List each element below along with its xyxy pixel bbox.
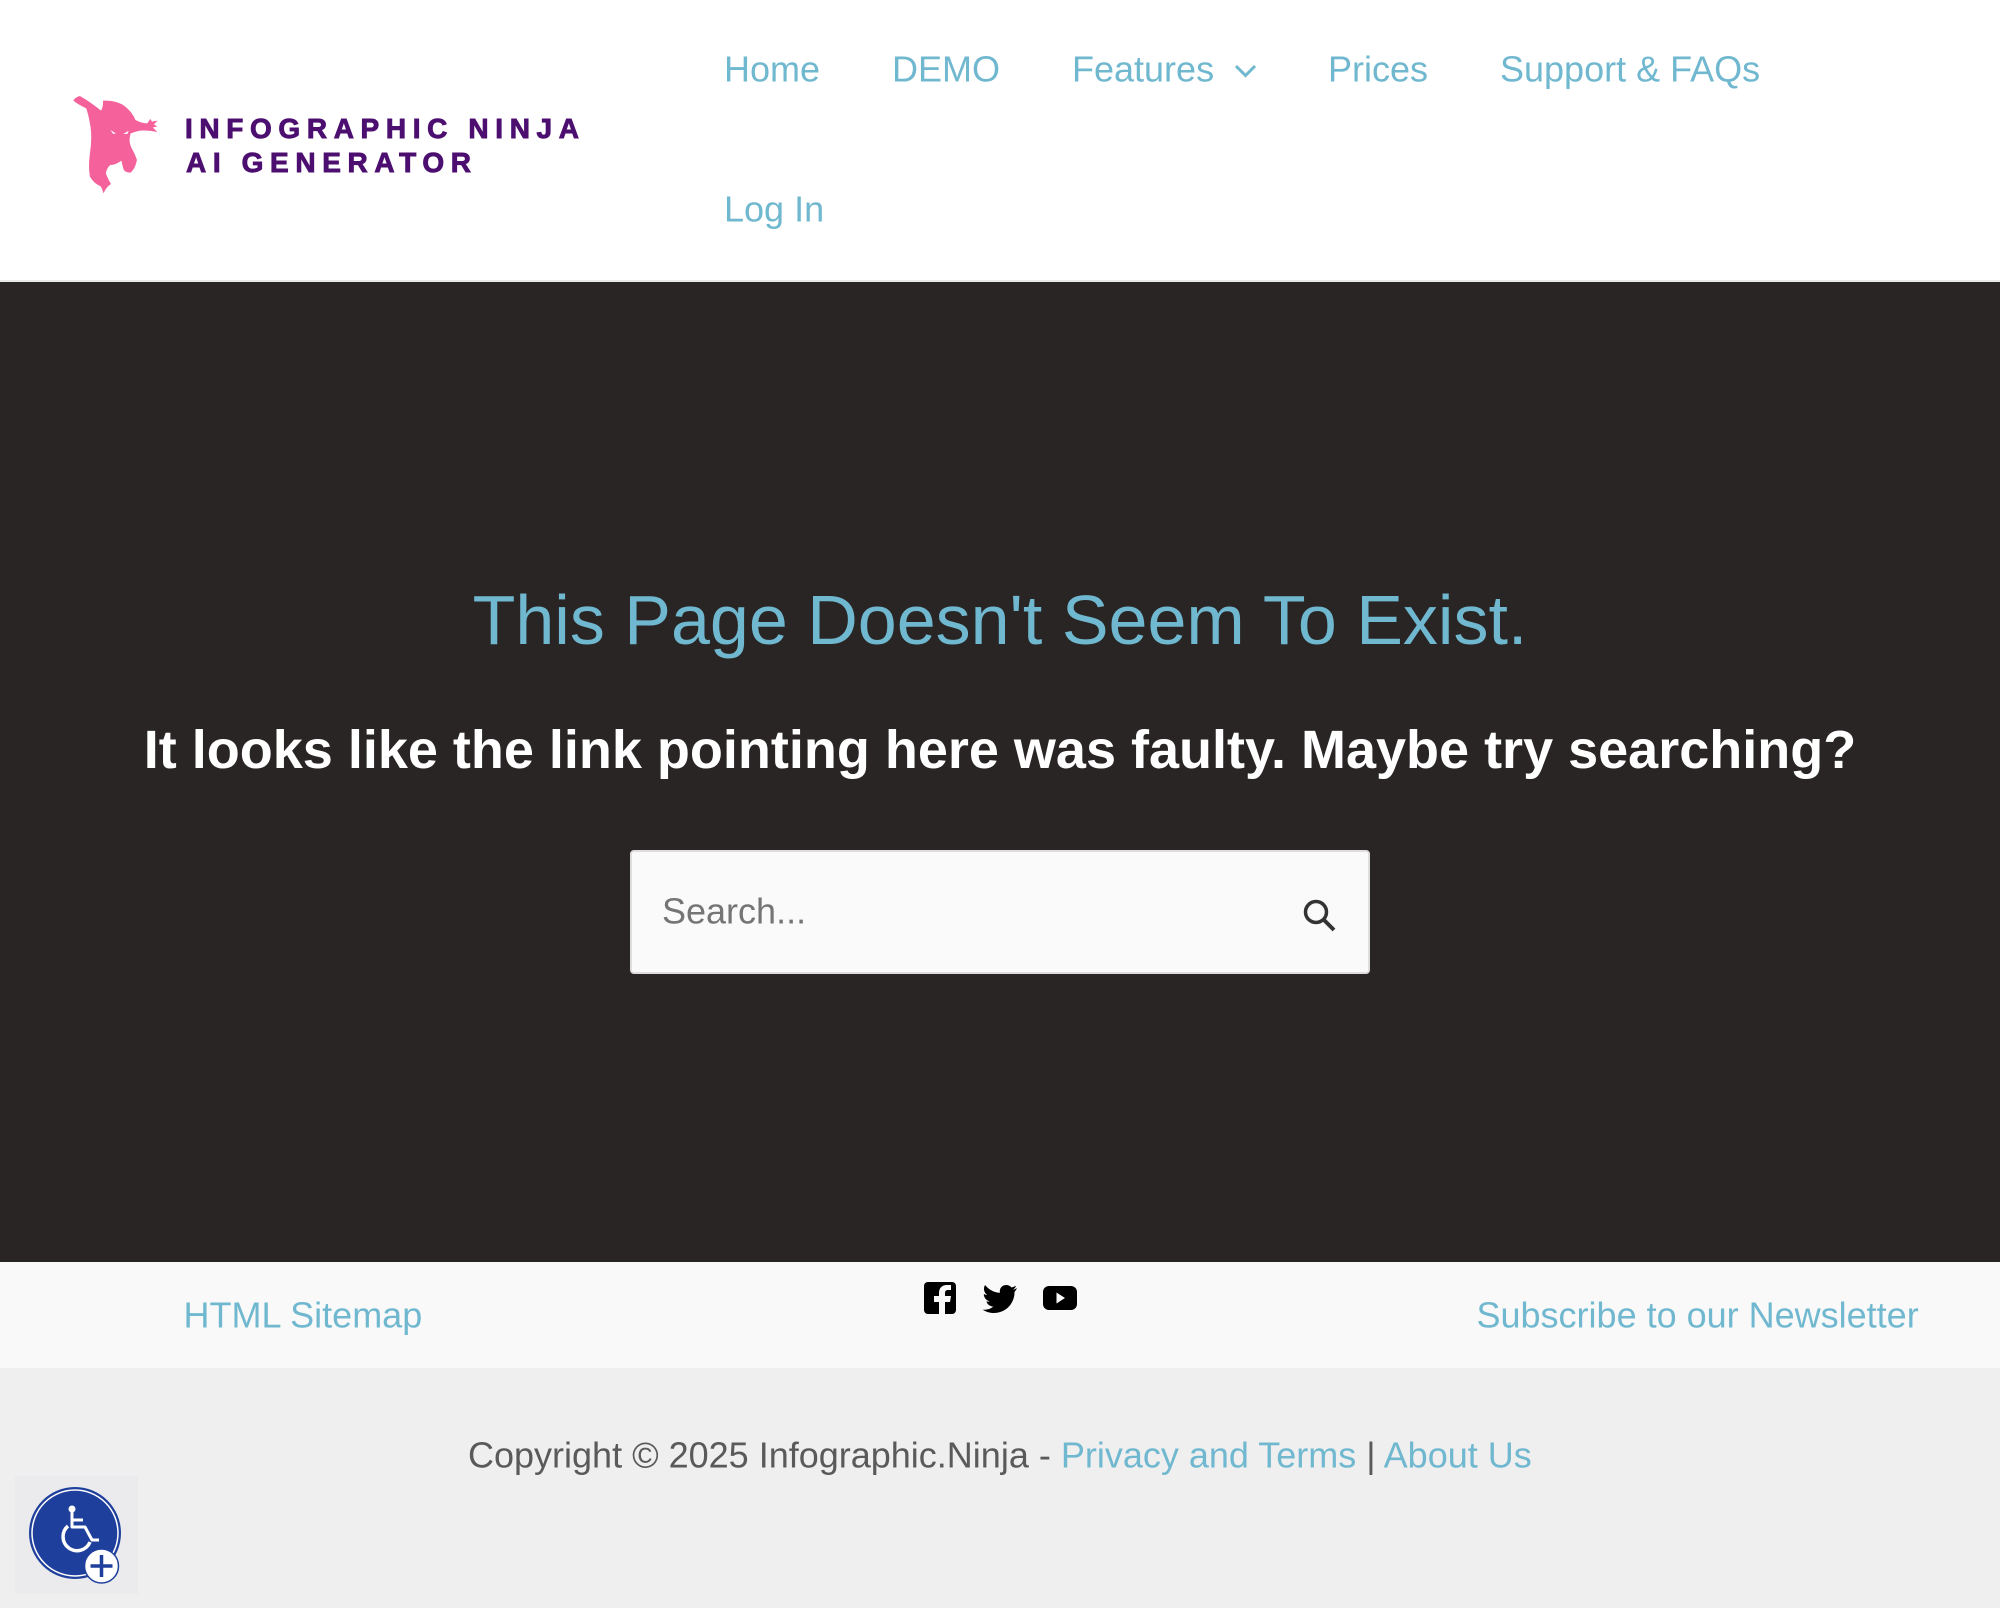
navigation menu: Home <box>724 48 820 90</box>
panel: 404 hero <box>0 282 2000 1262</box>
icon: magnifying glass <box>1306 902 1334 930</box>
search placeholder: Search... <box>662 890 806 932</box>
link: newsletter: Subscribe to our Newsletter <box>1476 1294 1919 1336</box>
icon: Facebook <box>924 1282 956 1314</box>
panel: site header <box>0 0 2000 282</box>
icon: plus badge <box>84 1549 118 1583</box>
navigation menu: Prices <box>1328 48 1428 90</box>
navigation menu: Log In <box>724 188 824 230</box>
link: HTML Sitemap: HTML Sitemap <box>184 1294 422 1336</box>
icon: pink ninja logo <box>73 96 158 193</box>
icon: dropdown chevron <box>1236 66 1255 76</box>
logo wordmark <box>185 113 579 178</box>
search box <box>631 851 1369 973</box>
navigation menu <box>724 48 1760 230</box>
heading: This Page Doesn't Seem To Exist. <box>473 581 1527 659</box>
navigation menu: DEMO <box>892 48 1000 90</box>
icon: Twitter <box>982 1285 1017 1313</box>
subheading: It looks like the link pointing here was faulty. Maybe try searching? <box>144 720 1856 780</box>
logo wordmark: AI GENERATOR <box>186 147 471 178</box>
navigation menu: Features <box>1072 48 1214 90</box>
navigation menu: Support & FAQs <box>1500 48 1760 90</box>
icon: YouTube <box>1043 1286 1077 1310</box>
accessibility widget <box>15 1476 138 1594</box>
panel: copyright bar <box>0 1368 2000 1608</box>
icon: wheelchair <box>63 1506 99 1551</box>
panel: footer links bar <box>0 1262 2000 1368</box>
copyright text: Copyright © 2025 Infographic.Ninja - Privacy and Terms | About Us <box>468 1434 1532 1476</box>
logo wordmark: INFOGRAPHIC NINJA <box>185 113 579 144</box>
